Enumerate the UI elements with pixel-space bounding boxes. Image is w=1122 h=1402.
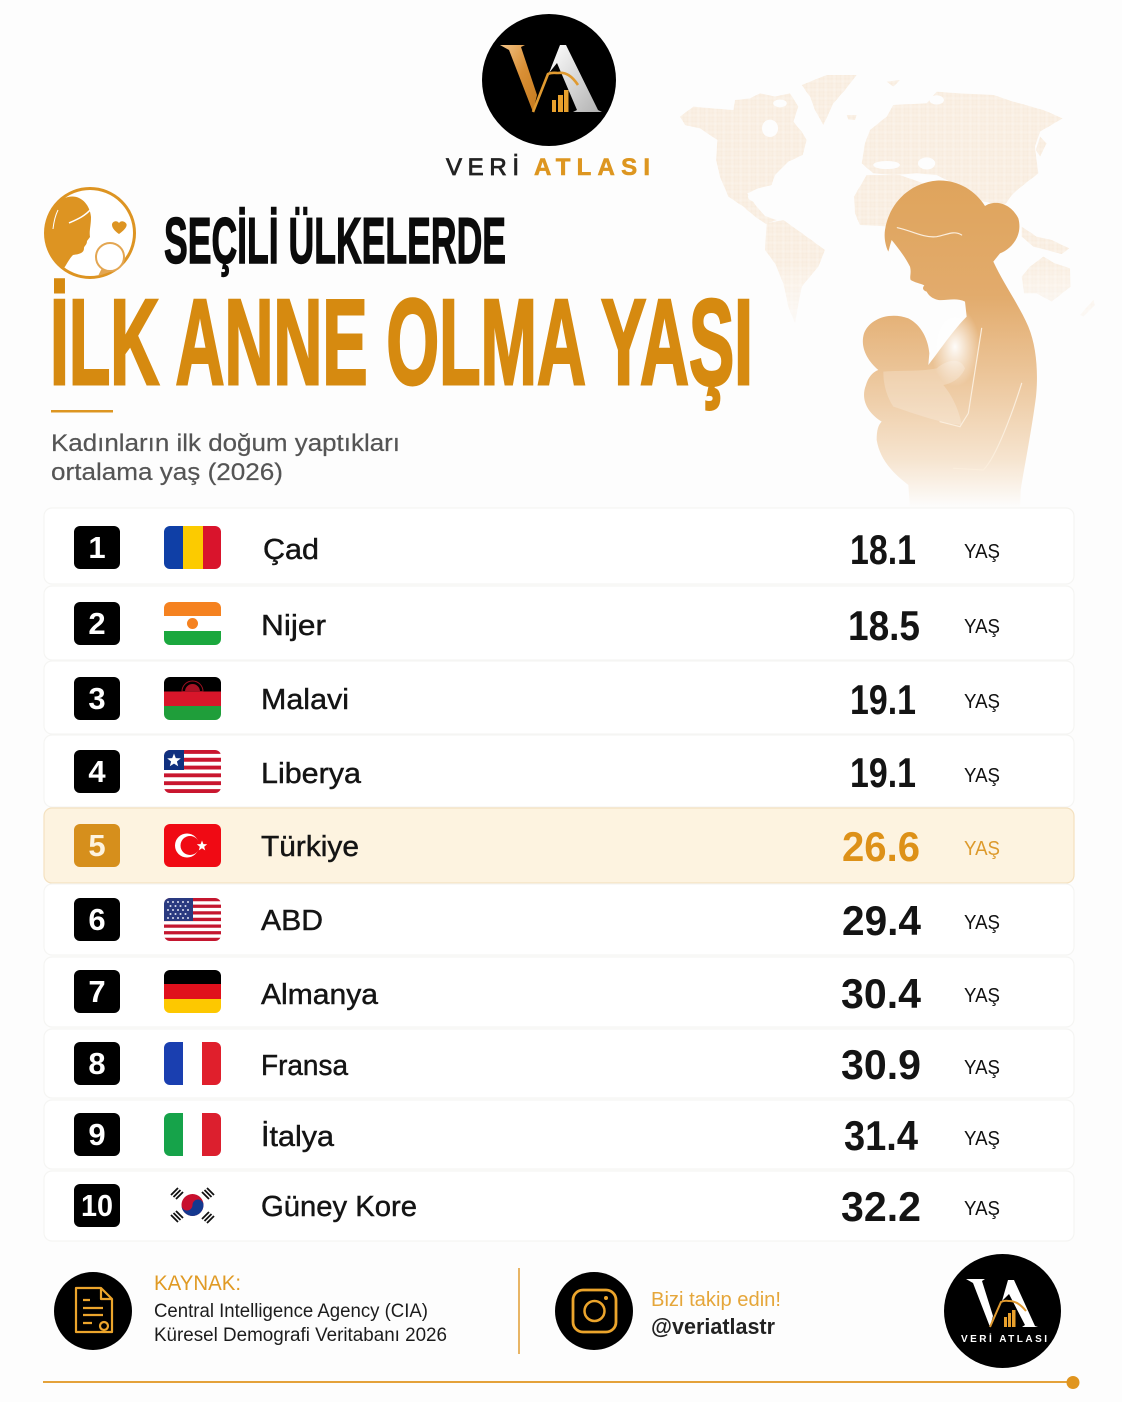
chest glow (930, 307, 980, 387)
icon: mother face medallion (46, 188, 134, 278)
row 5: Türkiye (highlighted) (44, 808, 1074, 883)
row 10: Güney Kore (44, 1171, 1074, 1241)
row 2: Nijer (44, 586, 1074, 660)
world map background (680, 75, 1095, 323)
row 4: Liberya (44, 735, 1074, 807)
brand wordmark (446, 154, 650, 181)
footer logo (944, 1254, 1061, 1368)
baby arm and torso light area (883, 361, 965, 425)
rank 1 (74, 526, 120, 569)
source text: KAYNAK: (154, 1272, 241, 1295)
country name: Almanya (261, 979, 379, 1011)
unit: YAŞ (964, 1128, 1000, 1150)
flag: Italy (164, 1113, 221, 1156)
source text (154, 1272, 447, 1346)
country name: Malavi (261, 684, 349, 716)
rank 3 (74, 677, 120, 720)
row 1: Çad (44, 508, 1074, 584)
unit: YAŞ (964, 838, 1000, 860)
value: 19.1 (850, 749, 916, 796)
row 9: İtalya (44, 1100, 1074, 1169)
logo A (549, 45, 602, 112)
value: 29.4 (842, 897, 922, 944)
logo bars (552, 90, 568, 112)
country name: Güney Kore (261, 1191, 417, 1223)
brand wordmark: VERİ (446, 154, 519, 181)
country name: Liberya (261, 758, 362, 790)
country name: ABD (261, 905, 323, 937)
subtitle (51, 430, 400, 486)
flag: Chad (164, 526, 221, 569)
silhouette body (863, 181, 1037, 508)
unit: YAŞ (964, 1057, 1000, 1079)
row 6: ABD (44, 884, 1074, 955)
footer timeline line (43, 1376, 1080, 1389)
rank 2 (74, 602, 120, 645)
icon: heart (112, 221, 127, 234)
rank 3: 3 (88, 681, 106, 716)
rank 9: 9 (88, 1117, 106, 1152)
flag: USA (164, 898, 221, 941)
unit: YAŞ (964, 541, 1000, 563)
row 7: Almanya (44, 957, 1074, 1027)
unit: YAŞ (964, 985, 1000, 1007)
row 8: Fransa (44, 1029, 1074, 1098)
row 3: Malavi (44, 661, 1074, 734)
rank 7 (74, 970, 120, 1013)
rank 4: 4 (88, 754, 106, 789)
rank 8: 8 (88, 1046, 106, 1081)
social text: Bizi takip edin! (651, 1289, 781, 1311)
value: 30.9 (841, 1041, 921, 1088)
flag: Germany (164, 970, 221, 1013)
rank 2: 2 (88, 606, 106, 641)
value: 31.4 (844, 1112, 919, 1159)
rank 7: 7 (88, 974, 106, 1009)
brand wordmark: ATLASI (534, 154, 650, 181)
flag: Malawi (164, 677, 221, 720)
rank 10: 10 (81, 1188, 113, 1223)
source text: Küresel Demografi Veritabanı 2026 (154, 1325, 447, 1346)
value: 32.2 (841, 1183, 921, 1230)
rank 1: 1 (88, 530, 106, 565)
source text: Central Intelligence Agency (CIA) (154, 1301, 428, 1322)
rank 5: 5 (88, 828, 106, 863)
country name: Fransa (261, 1050, 349, 1082)
flag: Liberia (164, 750, 221, 793)
country name: Türkiye (261, 831, 359, 863)
country name: Nijer (261, 610, 326, 642)
rank 9 (74, 1113, 120, 1156)
heading: seçili ülkelerde: SEÇİLİ ÜLKELERDE (164, 204, 506, 277)
value: 18.1 (850, 526, 916, 573)
social text (651, 1289, 781, 1339)
unit: YAŞ (964, 765, 1000, 787)
logo V (500, 45, 537, 112)
flag: Türkiye (164, 824, 221, 867)
unit: YAŞ (964, 616, 1000, 638)
ranking table (44, 508, 1074, 1241)
icon: baby head (96, 243, 124, 271)
flag: France (164, 1042, 221, 1085)
value: 30.4 (841, 970, 922, 1017)
value: 19.1 (850, 676, 916, 723)
footer logo: VERİ ATLASI (961, 1332, 1047, 1345)
unit: YAŞ (964, 691, 1000, 713)
rank 5 (74, 824, 120, 867)
unit: YAŞ (964, 1198, 1000, 1220)
icon: source document (54, 1272, 132, 1350)
highlight lines (897, 228, 1022, 470)
rank 8 (74, 1042, 120, 1085)
accent rule (51, 410, 113, 412)
subtitle: Kadınların ilk doğum yaptıkları (51, 430, 400, 457)
value: 26.6 (842, 823, 920, 870)
subtitle: ortalama yaş (2026) (51, 459, 283, 486)
flag: South Korea (170, 1187, 215, 1224)
icon: instagram (555, 1272, 633, 1350)
social text: @veriatlastr (651, 1314, 775, 1339)
mother and baby silhouette (863, 181, 1037, 508)
country name: Çad (263, 534, 319, 566)
rank 4 (74, 750, 120, 793)
logo gold swoosh (533, 73, 578, 112)
flag: Niger (164, 602, 221, 645)
rank 10 (74, 1184, 120, 1227)
value: 18.5 (848, 602, 920, 649)
rank 6: 6 (88, 902, 106, 937)
unit: YAŞ (964, 912, 1000, 934)
main logo (482, 14, 616, 146)
country name: İtalya (261, 1120, 335, 1153)
rank 6 (74, 898, 120, 941)
logo circle (482, 14, 616, 146)
